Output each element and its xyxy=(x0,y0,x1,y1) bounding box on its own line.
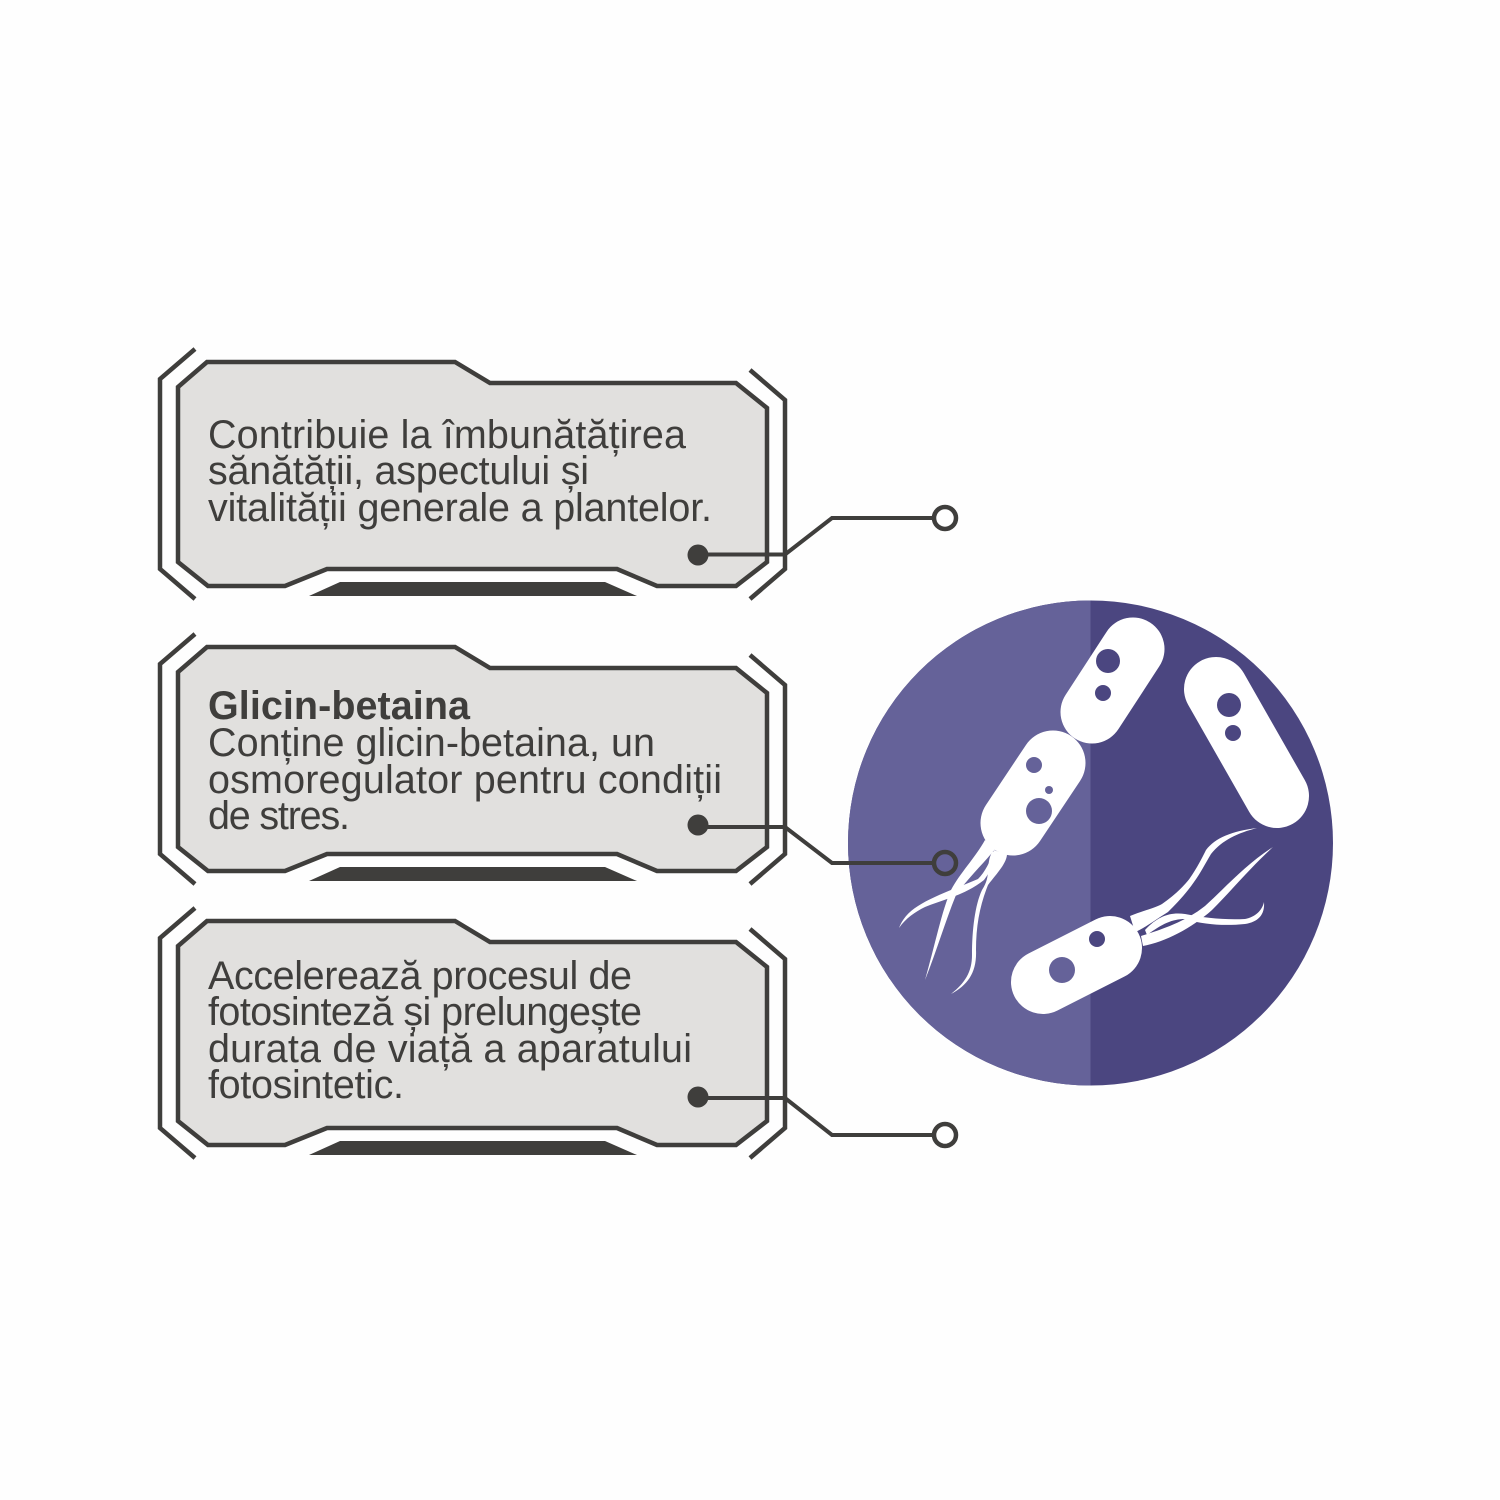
panel 1 body xyxy=(178,362,767,586)
bacterium: upper right xyxy=(1216,689,1277,796)
panel 2 left bracket xyxy=(160,634,195,884)
bacteria illustration xyxy=(848,600,1333,1086)
panel 2 right bracket xyxy=(750,655,785,884)
panel 2 text: Glicin-betaina xyxy=(208,684,471,728)
panel 2: glycine betaine xyxy=(160,634,956,884)
panel 3 text: fotosinteză și prelungește xyxy=(208,990,642,1034)
panel 3 left bracket xyxy=(160,908,195,1158)
panel 2 text: Conține glicin-betaina, un xyxy=(208,721,655,765)
panel 2 body xyxy=(178,647,767,871)
panel 2 text: de stres. xyxy=(208,794,350,838)
panel 3 text xyxy=(208,954,692,1107)
panel 3 body xyxy=(178,921,767,1145)
bacterium: left with flagella xyxy=(899,757,1053,994)
panel 1 bottom bar xyxy=(309,582,637,596)
panel 1 connector xyxy=(688,507,956,566)
panel 3 right bracket xyxy=(750,929,785,1158)
panel 3 text: durata de viață a aparatului xyxy=(208,1027,692,1071)
panel 3 text: fotosintetic. xyxy=(208,1063,404,1107)
panel 1 text: vitalității generale a plantelor. xyxy=(208,486,712,530)
panel 1 right bracket xyxy=(750,370,785,599)
panel 1 text: sănătății, aspectului și xyxy=(208,449,589,493)
panel 1 text: Contribuie la îmbunătățirea xyxy=(208,413,686,457)
panel 2 bottom bar xyxy=(309,867,637,881)
circle background xyxy=(848,600,1333,1086)
bacterium: lower with flagella xyxy=(1043,828,1273,983)
panel 2 text xyxy=(208,684,722,838)
panel 2 text: osmoregulator pentru condiții xyxy=(208,758,722,802)
panel 3 bottom bar xyxy=(309,1141,637,1155)
panel 1: plant health xyxy=(160,349,956,599)
panel 2 connector xyxy=(688,814,956,874)
panel 1 left bracket xyxy=(160,349,195,599)
panel 3 text: Accelerează procesul de xyxy=(208,954,632,998)
panel 1 text xyxy=(208,413,712,530)
panel 3 connector xyxy=(688,1086,956,1146)
bacterium: upper middle xyxy=(1092,649,1133,712)
panel 3: photosynthesis xyxy=(160,908,956,1158)
